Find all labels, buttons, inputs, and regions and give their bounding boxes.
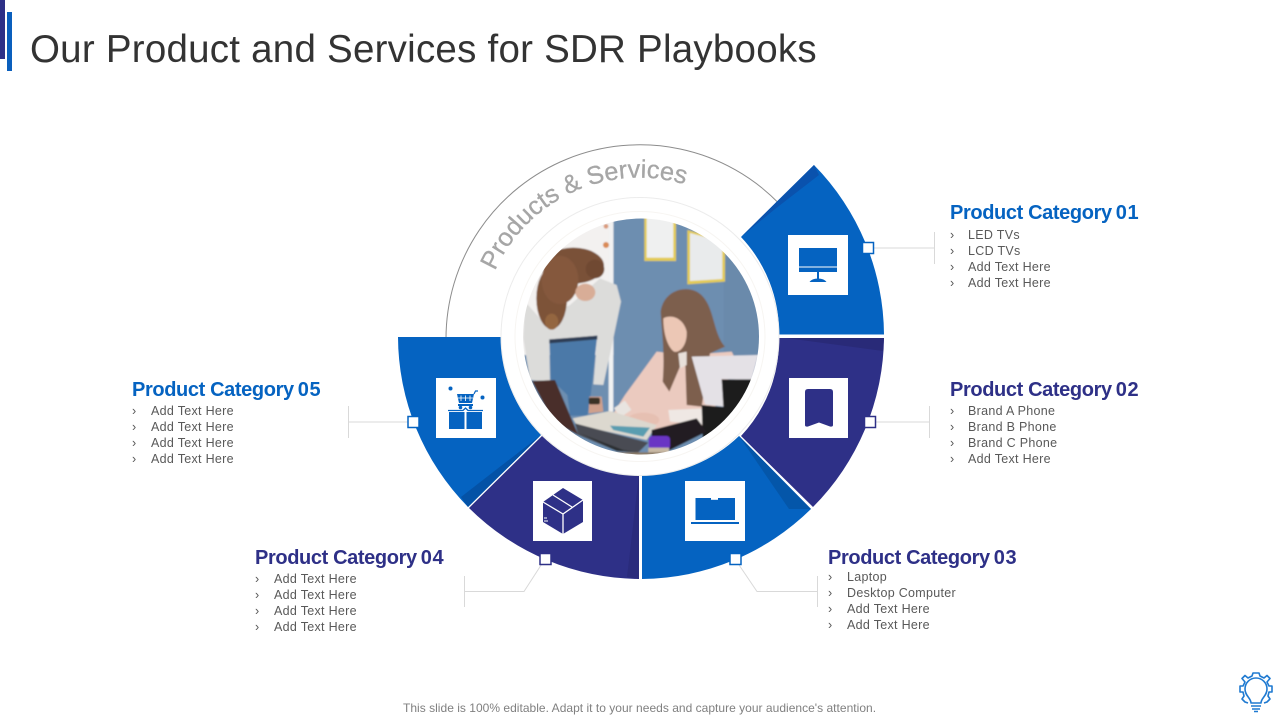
text block: category 05: › <box>132 420 136 434</box>
text block: category 02: › <box>950 420 954 434</box>
text block: category 04: › <box>255 588 259 602</box>
text block: category 02: Brand C Phone <box>968 436 1057 450</box>
white ring <box>501 198 779 476</box>
text block: category 01: › <box>950 260 954 274</box>
text block: category 02: Product Category02 <box>950 379 1139 401</box>
text block: category 01 <box>950 202 1139 290</box>
icon: parcel box <box>533 481 592 541</box>
text block: category 03 <box>828 547 1017 632</box>
text block: category 04: › <box>255 620 259 634</box>
segment 02 <box>741 338 884 507</box>
text block: category 04: Product Category04 <box>255 547 444 569</box>
papers and laptop <box>573 411 657 440</box>
text block: category 04: Add Text Here <box>274 620 357 634</box>
text block: category 02: Add Text Here <box>968 452 1051 466</box>
text block: category 05: Add Text Here <box>151 420 234 434</box>
text block: category 02: › <box>950 404 954 418</box>
monitor <box>692 355 758 407</box>
text block: category 03: › <box>828 602 832 616</box>
text block: category 03: Product Category03 <box>828 547 1017 569</box>
text block: category 04: › <box>255 604 259 618</box>
text block: category 03: Desktop Computer <box>847 586 956 600</box>
gray arc <box>446 145 780 339</box>
segment 04 <box>469 436 639 579</box>
text block: category 04: Add Text Here <box>274 572 357 586</box>
right woman <box>613 352 737 432</box>
text block: category 03: › <box>828 586 832 600</box>
text block: category 02: › <box>950 436 954 450</box>
segment 05 <box>398 337 541 507</box>
text block: category 02 <box>950 379 1139 466</box>
text block: category 01: Product Category01 <box>950 202 1139 224</box>
left woman <box>523 278 621 385</box>
icon: monitor <box>788 235 848 295</box>
text block: category 05: › <box>132 436 136 450</box>
text block: category 04: Add Text Here <box>274 588 357 602</box>
text block: category 02: Brand B Phone <box>968 420 1057 434</box>
text block: category 01: LED TVs <box>968 228 1020 242</box>
text block: category 05: Add Text Here <box>151 436 234 450</box>
footer note: This slide is 100% editable. Adapt it to your needs and capture your audience's attention. <box>403 701 876 715</box>
text block: category 05: › <box>132 404 136 418</box>
text block: category 02: › <box>950 452 954 466</box>
title: Our Product and Services for SDR Playbooks <box>30 28 817 71</box>
text block: category 02: Brand A Phone <box>968 404 1055 418</box>
text block: category 04: Add Text Here <box>274 604 357 618</box>
icon: laptop <box>685 481 745 541</box>
icon: lightbulb gear <box>1240 673 1272 712</box>
text block: category 05: Add Text Here <box>151 452 234 466</box>
icon: cart and box <box>436 378 496 438</box>
text block: category 04: › <box>255 572 259 586</box>
text block: category 01: Add Text Here <box>968 276 1051 290</box>
text block: category 03: Add Text Here <box>847 618 930 632</box>
photo: two women at a desk <box>523 218 759 454</box>
segment 03 <box>642 436 811 579</box>
text block: category 05 <box>132 379 321 466</box>
text block: category 05: › <box>132 452 136 466</box>
arc label: Products & Services <box>480 159 687 270</box>
segment 01 <box>741 165 884 334</box>
text block: category 03: Add Text Here <box>847 602 930 616</box>
text block: category 05: Product Category05 <box>132 379 321 401</box>
text block: category 03: Laptop <box>847 570 887 584</box>
text block: category 01: › <box>950 244 954 258</box>
text block: category 03: › <box>828 570 832 584</box>
icon: bookmark <box>789 378 848 438</box>
text block: category 04 <box>255 547 444 634</box>
accent bars <box>0 0 12 71</box>
text block: category 05: Add Text Here <box>151 404 234 418</box>
connectors <box>348 232 934 607</box>
text block: category 03: › <box>828 618 832 632</box>
text block: category 01: LCD TVs <box>968 244 1021 258</box>
text block: category 01: Add Text Here <box>968 260 1051 274</box>
text block: category 01: › <box>950 276 954 290</box>
connector nodes <box>408 242 876 564</box>
text block: category 01: › <box>950 228 954 242</box>
